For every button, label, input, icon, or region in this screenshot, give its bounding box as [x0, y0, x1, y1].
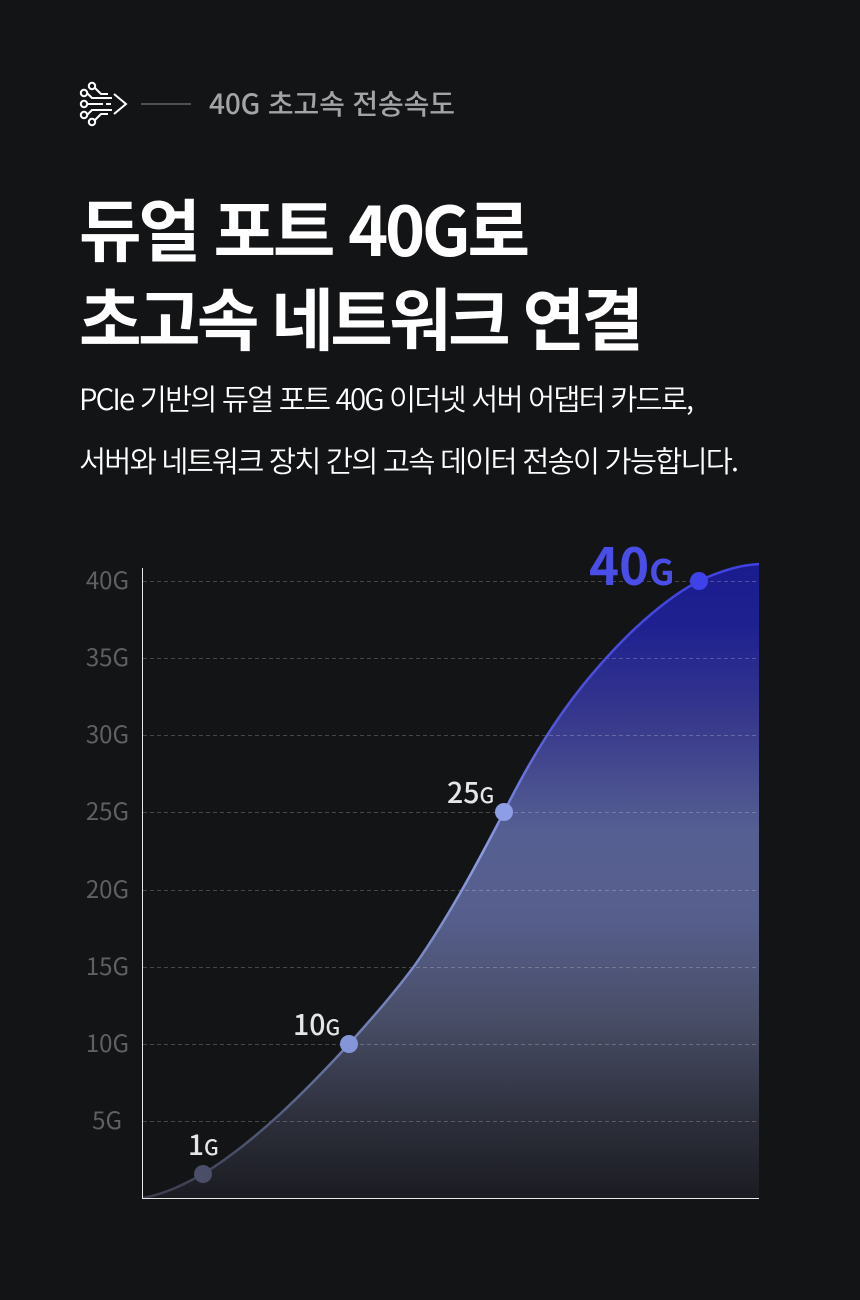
y axis labels: 5G	[92, 1101, 122, 1136]
description: PCIe 기반의 듀얼 포트 40G 이더넷 서버 어댑터 카드로,	[79, 377, 694, 419]
title: 초고속 네트워크 연결	[79, 266, 644, 365]
point: 25G: 25G	[447, 771, 494, 812]
grid lines	[143, 582, 758, 1122]
y axis labels	[86, 561, 129, 1136]
divider line	[141, 103, 191, 105]
point: 10G: 10G	[293, 1003, 340, 1044]
description: 서버와 네트워크 장치 간의 고속 데이터 전송이 가능합니다.	[79, 439, 739, 481]
y axis labels: 25G	[86, 792, 129, 827]
y axis labels: 40G	[86, 561, 129, 596]
eyebrow label: 40G 초고속 전송속도	[209, 83, 455, 123]
point: 1G: 1G	[188, 1124, 219, 1164]
icon: data arrow	[81, 83, 126, 125]
point: 10G	[293, 1003, 358, 1053]
title: 듀얼 포트 40G로	[79, 177, 530, 276]
y axis labels: 15G	[86, 947, 129, 982]
curve line	[143, 564, 759, 1198]
point: 1G	[188, 1124, 219, 1183]
area chart	[86, 526, 759, 1198]
axes	[142, 568, 759, 1198]
y axis labels: 10G	[86, 1024, 129, 1059]
y axis labels: 35G	[86, 638, 129, 673]
y axis labels: 30G	[86, 715, 129, 750]
point: 40G: 40G	[589, 526, 674, 600]
y axis labels: 20G	[86, 870, 129, 905]
point: 25G	[447, 771, 513, 821]
description	[79, 377, 739, 481]
area fill	[143, 564, 759, 1198]
title	[79, 177, 644, 365]
